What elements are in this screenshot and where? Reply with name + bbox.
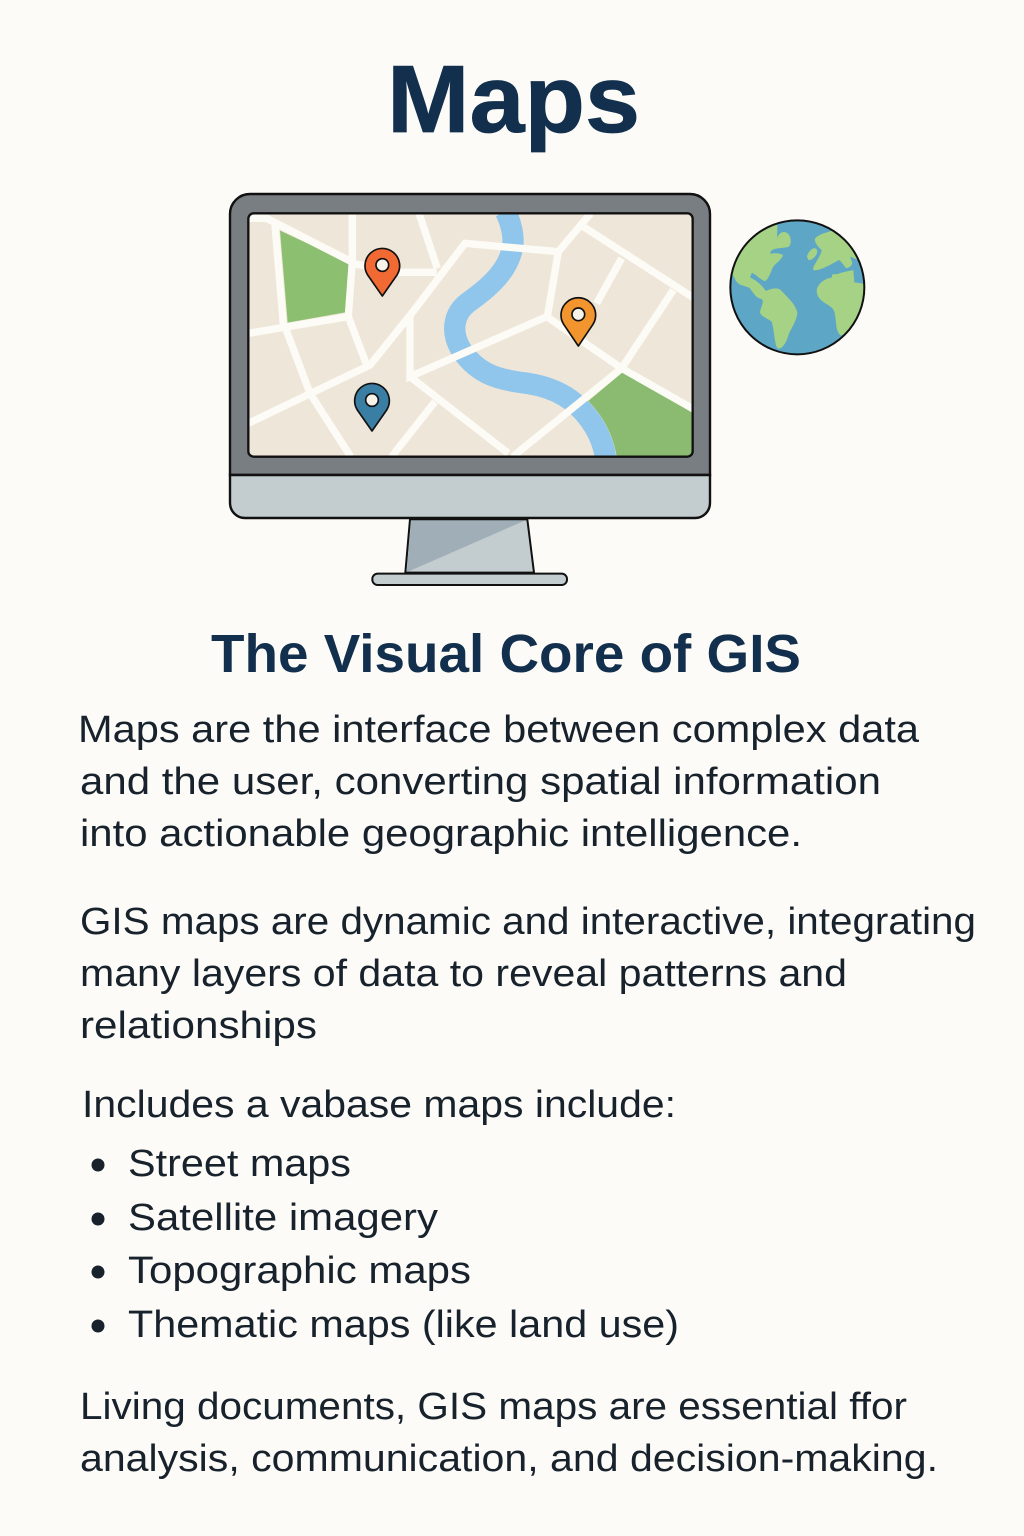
text block: dynamic maps paragraph: [80, 901, 976, 1047]
text block: closing paragraph: Living documents, GIS maps are essential ffor: [80, 1386, 907, 1428]
text block: closing paragraph: [80, 1386, 938, 1480]
text block: dynamic maps paragraph: many layers of data to reveal patterns and: [80, 953, 847, 995]
monitor stand: [372, 519, 567, 585]
parks: [280, 231, 693, 457]
text block: intro paragraph: Maps are the interface between complex data: [78, 709, 920, 751]
bullet list: map types: [92, 1143, 679, 1346]
roads: [247, 213, 693, 457]
subtitle: The Visual Core of GIS: [211, 624, 801, 684]
bullet list: map types: Topographic maps: [128, 1250, 471, 1292]
title: Maps: [387, 46, 640, 153]
bullet list: map types: Satellite imagery: [128, 1197, 438, 1239]
text block: dynamic maps paragraph: GIS maps are dynamic and interactive, integrating: [80, 901, 976, 943]
bullet list: map types: Thematic maps (like land use): [128, 1304, 679, 1346]
river: [455, 212, 606, 458]
text block: list intro: Includes a vabase maps include:: [82, 1084, 676, 1126]
icon: globe: [725, 218, 868, 354]
text block: intro paragraph: and the user, converting spatial information: [80, 761, 881, 803]
text block: closing paragraph: analysis, communication, and decision-making.: [80, 1438, 938, 1480]
icon: blue pin: [355, 383, 389, 431]
monitor body: [230, 194, 710, 475]
text block: intro paragraph: [78, 709, 920, 855]
bullet list: map types: Street maps: [128, 1143, 351, 1185]
icon: orange pin: [561, 298, 596, 346]
map screen: [247, 212, 693, 458]
text block: intro paragraph: into actionable geographic intelligence.: [80, 813, 802, 855]
icon: red-orange pin: [365, 248, 400, 296]
icon: computer monitor with map: [230, 194, 710, 585]
text block: dynamic maps paragraph: relationships: [80, 1005, 317, 1047]
